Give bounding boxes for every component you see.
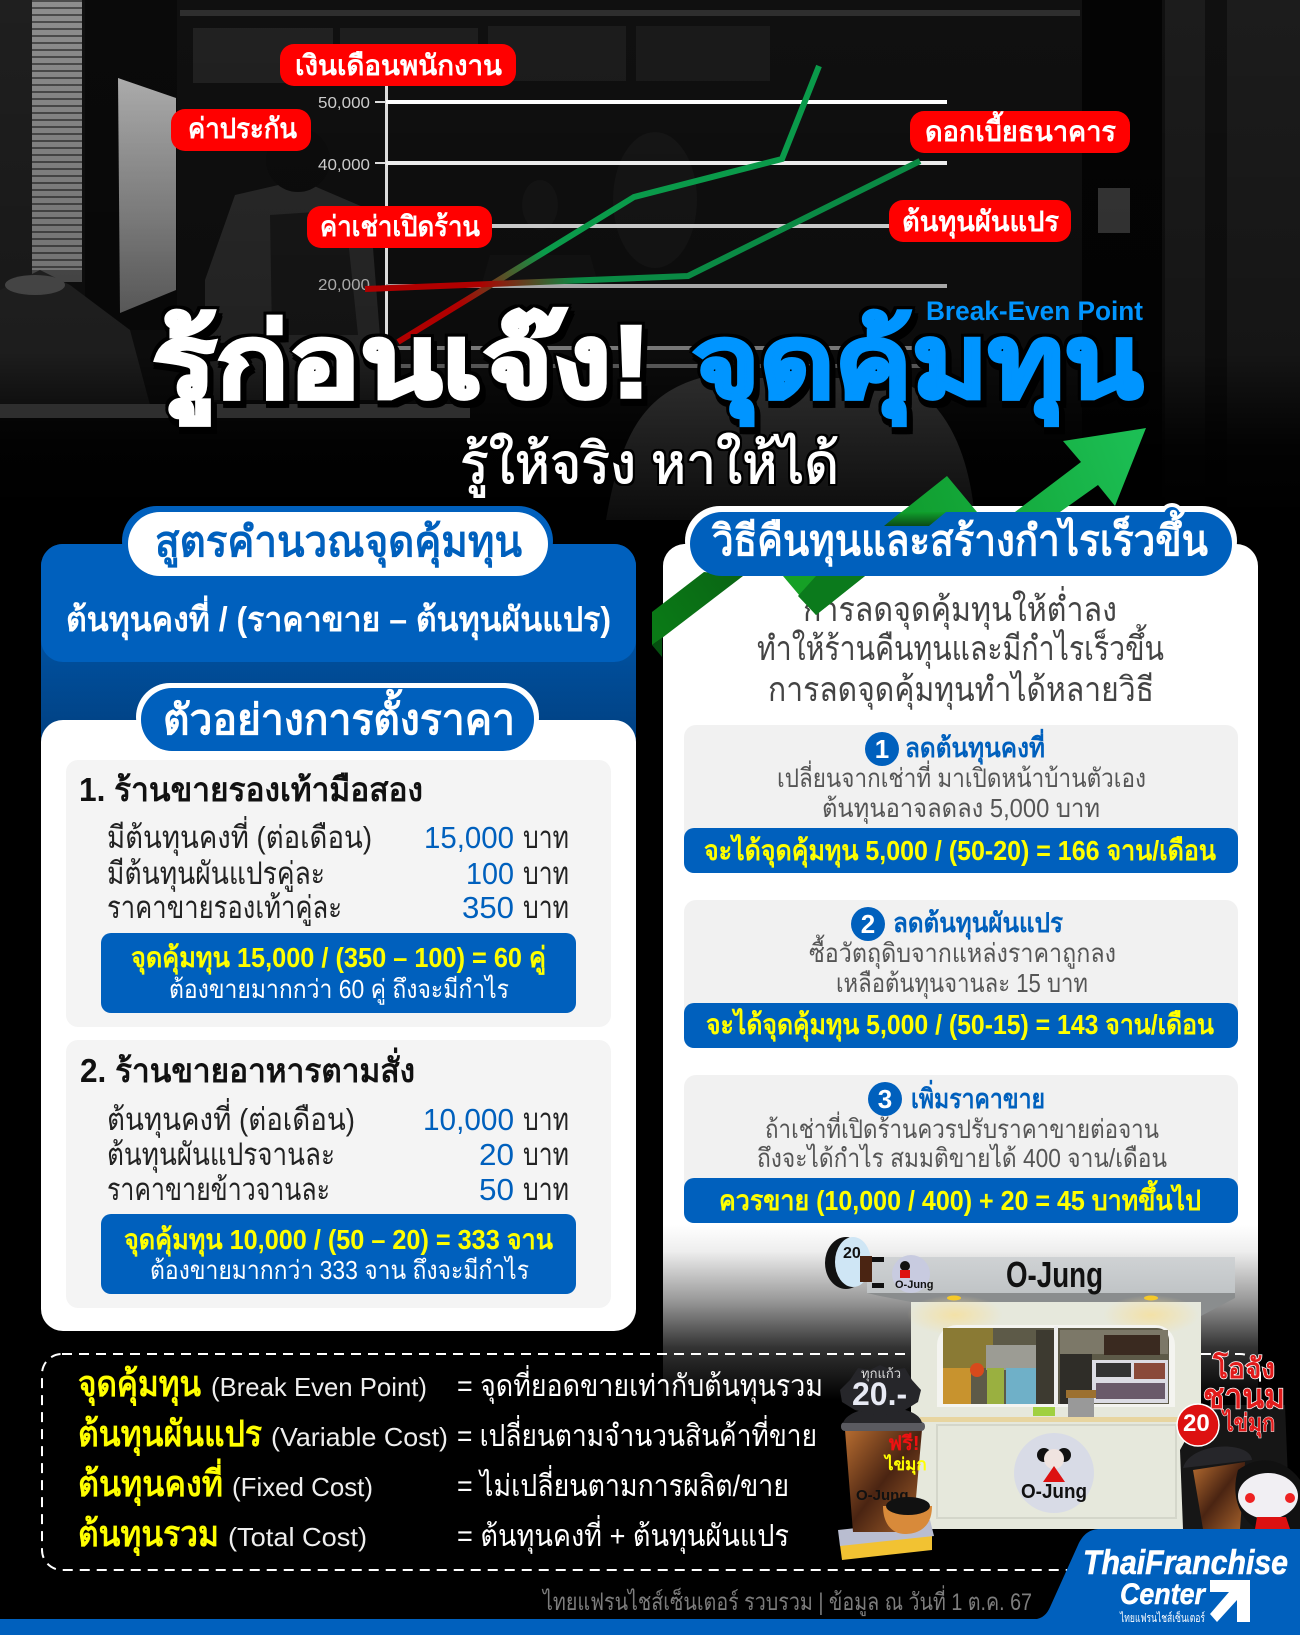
term: break-even point: จุดคุ้มทุน	[78, 1363, 201, 1407]
right cup standee: โอจัง	[1212, 1351, 1275, 1384]
tag: variable costs: ต้นทุนผันแปร	[902, 206, 1059, 239]
right cup standee	[1177, 1351, 1300, 1530]
row: variable cost: บาท	[523, 856, 569, 891]
row: fixed cost	[107, 816, 569, 857]
panel: formula	[41, 506, 636, 784]
card: raise selling price	[684, 1075, 1238, 1223]
tag: bank interest	[910, 110, 1130, 153]
intro text: การลดจุดคุ้มทุนทำได้หลายวิธี	[768, 670, 1154, 710]
row: fixed cost: บาท	[523, 820, 569, 855]
title tag: Break-Even Point: Break-Even Point	[926, 296, 1143, 326]
chart axis	[375, 86, 388, 371]
heading pill: ways to recoup	[690, 503, 1232, 576]
step badge 3: 3	[878, 1084, 892, 1114]
card: second-hand shoe shop: 1. ร้านขายรองเท้ามือสอง	[79, 771, 423, 808]
right cup standee: ไข่มุก	[1220, 1408, 1275, 1439]
round side sign: 20	[843, 1245, 861, 1262]
card: reduce fixed cost	[684, 725, 1238, 873]
result box	[101, 933, 576, 1013]
result bar: ควรขาย (10,000 / 400) + 20 = 45 บาทขึ้นไป	[719, 1179, 1201, 1216]
term: total cost: = ต้นทุนคงที่ + ต้นทุนผันแปร	[457, 1515, 789, 1555]
term: total cost: ต้นทุนรวม	[78, 1513, 219, 1557]
left cup standee: ทุกแก้ว	[861, 1366, 901, 1382]
step badge 2	[851, 907, 885, 941]
roof logo disc	[892, 1255, 934, 1293]
axis labels: 20,000	[318, 277, 370, 294]
row: selling price: บาท	[523, 1172, 569, 1207]
panel: pricing examples	[41, 683, 636, 1331]
right cup standee: 20	[1183, 1410, 1210, 1437]
left cup standee: 20.-	[852, 1376, 907, 1412]
term: variable cost: (Variable Cost)	[271, 1422, 448, 1452]
logo: ThaiFranchise Center	[1037, 1529, 1300, 1635]
term: fixed cost: (Fixed Cost)	[232, 1472, 373, 1502]
term: fixed cost: ต้นทุนคงที่	[78, 1458, 223, 1507]
row: fixed cost: มีต้นทุนคงที่ (ต่อเดือน)	[107, 816, 372, 857]
row: selling price: ราคาขายข้าวจานละ	[107, 1172, 330, 1207]
row: variable cost: 20	[479, 1137, 514, 1172]
result box: จุดคุ้มทุน 15,000 / (350 – 100) = 60 คู่	[131, 942, 546, 975]
card: reduce variable cost: ลดต้นทุนผันแปร	[893, 908, 1063, 940]
row: selling price: บาท	[523, 890, 569, 925]
kiosk name: O-Jung	[1006, 1254, 1103, 1295]
axis labels: 40,000	[318, 157, 370, 174]
card: raise selling price: ถ้าเช่าที่เปิดร้านควรปรับราคาขายต่อจาน	[765, 1111, 1159, 1144]
panel: ways to recoup investment	[663, 544, 1258, 1420]
counter	[920, 1417, 1178, 1422]
heading pill: pricing examples: ตัวอย่างการตั้งราคา	[163, 688, 515, 743]
panel: glossary dashed box	[42, 1354, 1260, 1570]
row: selling price: 50	[479, 1172, 514, 1207]
card: reduce fixed cost: เปลี่ยนจากเช่าที่ มาเปิดหน้าบ้านตัวเอง	[777, 760, 1146, 793]
title: blue part: จุดคุ้มทุน	[692, 305, 1143, 426]
logo disc	[1014, 1433, 1094, 1513]
step badge 1: 1	[875, 734, 889, 764]
credit line: ไทยแฟรนไชส์เซ็นเตอร์ รวบรวม | ข้อมูล ณ วันที่ 1 ต.ค. 67	[541, 1585, 1032, 1617]
row: variable cost: บาท	[523, 1137, 569, 1172]
left cup standee: ไข่มุก	[883, 1454, 927, 1475]
result box	[101, 1214, 576, 1294]
row: fixed cost	[107, 1098, 569, 1139]
row: fixed cost: ต้นทุนคงที่ (ต่อเดือน)	[107, 1098, 355, 1139]
axis labels	[318, 95, 370, 294]
right cup standee: ชานม	[1203, 1378, 1285, 1416]
title	[152, 305, 1143, 426]
left cup standee: ฟรี!	[888, 1432, 920, 1455]
result bar	[684, 1178, 1238, 1223]
tag: bank interest: ดอกเบี้ยธนาคาร	[925, 110, 1116, 147]
row: variable cost	[107, 856, 569, 893]
row: variable cost: ต้นทุนผันแปรจานละ	[107, 1137, 335, 1174]
card: reduce variable cost	[684, 900, 1238, 1048]
tag: salary	[280, 44, 516, 86]
window	[937, 1325, 1175, 1417]
term: variable cost: ต้นทุนผันแปร	[78, 1413, 263, 1457]
heading pill: pricing examples	[136, 683, 539, 751]
row: variable cost	[107, 1137, 569, 1174]
subtitle: รู้ให้จริง หาให้ได้	[460, 432, 839, 498]
card: second-hand shoe shop	[66, 760, 611, 1027]
line chart	[318, 66, 947, 371]
heading pill: formula	[122, 506, 553, 576]
tag: shop rent: ค่าเช่าเปิดร้าน	[320, 211, 480, 242]
term: total cost: (Total Cost)	[228, 1522, 367, 1552]
tag: variable costs	[889, 200, 1071, 242]
result bar	[684, 828, 1238, 873]
card: reduce fixed cost: ลดต้นทุนคงที่	[905, 728, 1045, 765]
card: reduce variable cost: ซื้อวัตถุดิบจากแหล่งราคาถูกลง	[809, 934, 1116, 969]
left cup standee	[838, 1365, 934, 1560]
card: raise selling price: เพิ่มราคาขาย	[911, 1079, 1045, 1114]
kiosk roof	[867, 1257, 1235, 1293]
step badge 3	[868, 1082, 902, 1116]
roof logo disc: O-Jung	[895, 1279, 934, 1291]
tag: insurance: ค่าประกัน	[188, 113, 297, 144]
row: fixed cost: 10,000	[423, 1102, 514, 1137]
line: fixed costs rising	[398, 66, 819, 342]
intro text: การลดจุดคุ้มทุนให้ต่ำลง	[803, 586, 1117, 630]
result bar: จะได้จุดคุ้มทุน 5,000 / (50-15) = 143 จาน/เดือน	[706, 1008, 1214, 1042]
bottom blue strip	[0, 1619, 1300, 1635]
row: variable cost: มีต้นทุนผันแปรคู่ละ	[107, 856, 325, 893]
tag: insurance	[171, 109, 311, 151]
heading pill border: ways to recoup	[685, 506, 1237, 576]
row: selling price	[107, 890, 569, 926]
row: selling price: ราคาขายรองเท้าคู่ละ	[107, 890, 342, 926]
intro text	[757, 586, 1164, 710]
formula text: ต้นทุนคงที่ / (ราคาขาย – ต้นทุนผันแปร)	[66, 595, 611, 641]
logo: ThaiFranchise Center: Center	[1120, 1578, 1207, 1611]
term: break-even point: (Break Even Point)	[211, 1372, 427, 1402]
round side sign	[825, 1237, 884, 1289]
heading pill: ways to recoup: วิธีคืนทุนและสร้างกำไรเร็วขึ้น	[711, 509, 1208, 567]
row: fixed cost: บาท	[523, 1102, 569, 1137]
row: selling price: 350	[462, 890, 514, 925]
chart grid lines	[386, 100, 947, 368]
term: break-even point	[78, 1363, 823, 1407]
icon: rising green arrow	[652, 428, 1146, 657]
logo disc: O-Jung	[1021, 1481, 1087, 1503]
result box: ต้องขายมากกว่า 333 จาน ถึงจะมีกำไร	[150, 1255, 529, 1285]
icon: logo arrow	[1210, 1580, 1250, 1622]
card: reduce variable cost: เหลือต้นทุนจานละ 15 บาท	[836, 968, 1088, 999]
title: white part: รู้ก่อนเจ๊ง!	[152, 305, 651, 426]
line: variable costs rising	[365, 161, 920, 289]
term: break-even point: = จุดที่ยอดขายเท่ากับต้นทุนรวม	[457, 1365, 823, 1405]
result bar	[684, 1003, 1238, 1048]
lamps	[947, 1296, 1158, 1300]
logo: ThaiFranchise Center: ไทยแฟรนไชส์เซ็นเตอร์	[1119, 1610, 1205, 1625]
card: reduce fixed cost: ต้นทุนอาจลดลง 5,000 บาท	[822, 793, 1100, 824]
term: variable cost: = เปลี่ยนตามจำนวนสินค้าที่ขาย	[457, 1415, 817, 1453]
result box: ต้องขายมากกว่า 60 คู่ ถึงจะมีกำไร	[169, 974, 509, 1005]
row: variable cost: 100	[466, 856, 514, 891]
lower panel outline	[937, 1425, 1176, 1518]
step badge 1	[865, 732, 899, 766]
card: made-to-order food shop: 2. ร้านขายอาหารตามสั่ง	[80, 1047, 415, 1089]
term: variable cost	[78, 1413, 817, 1457]
tag: salary: เงินเดือนพนักงาน	[295, 50, 502, 81]
term: fixed cost: = ไม่เปลี่ยนตามการผลิต/ขาย	[457, 1465, 789, 1503]
card: made-to-order food shop	[66, 1040, 611, 1308]
intro text: ทำให้ร้านคืนทุนและมีกำไรเร็วขึ้น	[757, 624, 1164, 669]
axis labels: 50,000	[318, 95, 370, 112]
result box: จุดคุ้มทุน 10,000 / (50 – 20) = 333 จาน	[124, 1224, 553, 1257]
step badge 2: 2	[861, 909, 875, 939]
term: fixed cost	[78, 1458, 789, 1507]
term: total cost	[78, 1513, 789, 1557]
row: fixed cost: 15,000	[424, 820, 514, 855]
heading pill: formula: สูตรคำนวณจุดคุ้มทุน	[155, 518, 522, 568]
illustration: O-Jung kiosk	[825, 1237, 1300, 1560]
row: selling price	[107, 1172, 569, 1207]
tag: shop rent	[307, 206, 492, 248]
left cup standee: O-Jung	[856, 1487, 908, 1504]
result bar: จะได้จุดคุ้มทุน 5,000 / (50-20) = 166 จาน/เดือน	[704, 834, 1216, 868]
card: raise selling price: ถึงจะได้กำไร สมมติขายได้ 400 จาน/เดือน	[757, 1143, 1167, 1173]
